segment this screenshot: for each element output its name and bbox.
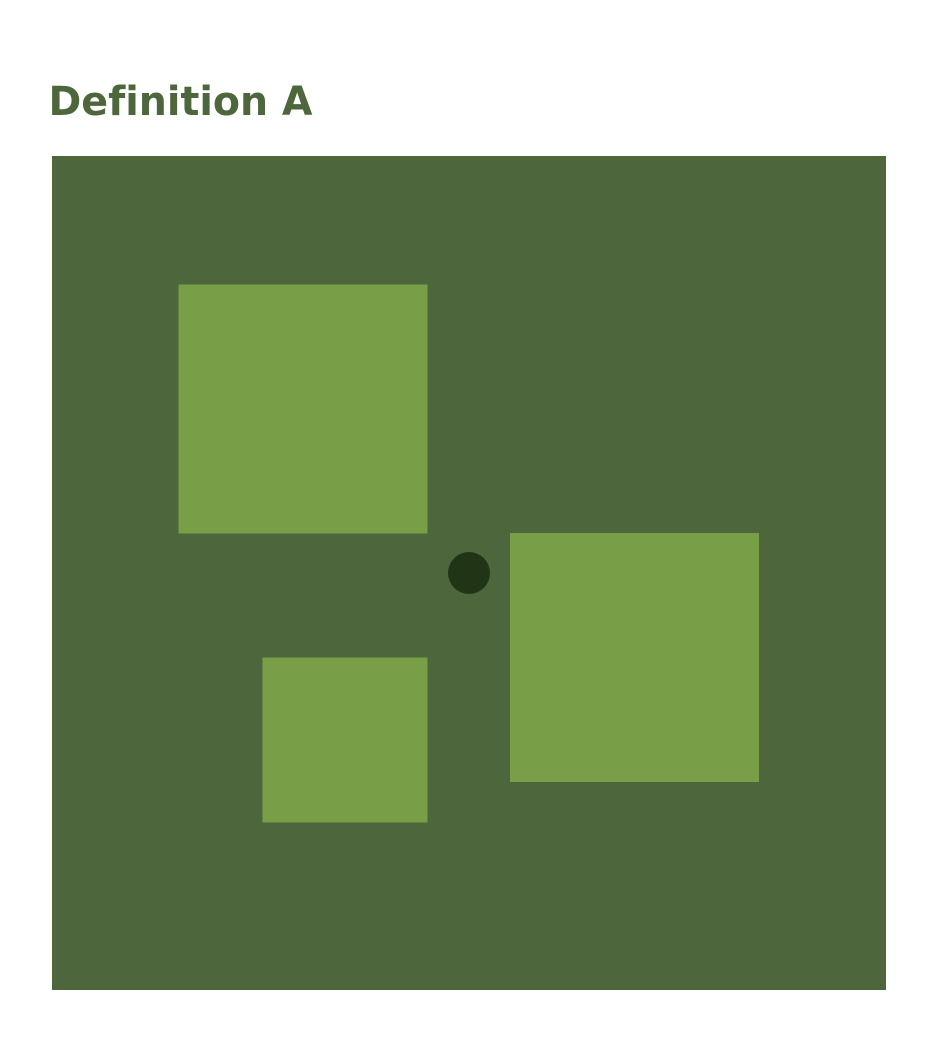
- square: bottom small: [262, 658, 428, 822]
- square: right: [510, 533, 759, 782]
- title: Definition A: [48, 79, 313, 125]
- panel: outer square: [52, 156, 886, 990]
- square: top left: [178, 284, 428, 534]
- center dot: [448, 552, 490, 594]
